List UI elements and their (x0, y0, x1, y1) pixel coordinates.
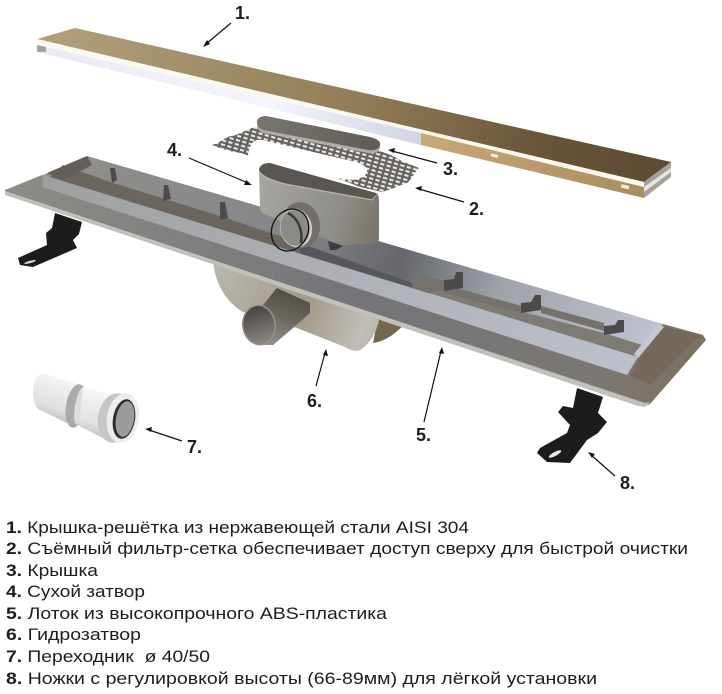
part 7: pipe adapter (33, 374, 143, 446)
long raised ribs (412, 276, 604, 331)
part 2: mesh filter (212, 127, 419, 192)
legend line 4: 4. Сухой затвор (6, 582, 145, 601)
arrow 3 (388, 148, 437, 163)
legend line 2: 2. Съёмный фильтр-сетка обеспечивает доступ сверху для быстрой очистки (6, 539, 688, 558)
arrow 8 (588, 452, 615, 476)
hydro trap body (213, 258, 403, 351)
arrow 1 (203, 23, 231, 47)
tray floor left (47, 165, 300, 262)
black O-ring (265, 203, 315, 257)
legend line 1: 1. Крышка-решётка из нержавеющей стали AISI 304 (6, 518, 469, 537)
callout number 3: 3. (443, 159, 458, 179)
arrow 7 (145, 427, 182, 441)
legend line 8: 8. Ножки с регулировкой высоты (66-89мм) для лёгкой установки (6, 669, 597, 688)
legend text block (6, 518, 688, 688)
legend line 6: 6. Гидрозатвор (6, 625, 141, 644)
drain outlet pipe (239, 288, 310, 348)
callout number 6: 6. (307, 391, 322, 411)
cover gold side (421, 133, 644, 198)
right adjustable foot (537, 388, 607, 463)
callout number 7: 7. (187, 437, 202, 457)
callout number 8: 8. (620, 473, 635, 493)
flange lower edge (5, 191, 650, 407)
arrow 6 (316, 349, 328, 386)
arrow 5 (424, 347, 444, 422)
callout number 2: 2. (469, 199, 484, 219)
cover white edge (37, 39, 644, 187)
cover silver side (37, 45, 421, 145)
callout number 4: 4. (167, 140, 182, 160)
callout number 5: 5. (416, 425, 431, 445)
tray floor middle (300, 243, 430, 305)
legend line 3: 3. Крышка (6, 561, 99, 580)
tray floor right (412, 283, 642, 358)
adapter narrow end (33, 374, 80, 423)
tray flange (5, 175, 706, 406)
legend line 7: 7. Переходник ø 40/50 (6, 647, 210, 666)
part 1: stainless cover grate (37, 28, 671, 198)
legend line 5: 5. Лоток из высокопрочного ABS-пластика (6, 604, 388, 623)
callout number 1: 1. (235, 3, 250, 23)
tray: ABS plastic channel (5, 156, 706, 407)
front rim band (42, 175, 638, 375)
adapter mid section (79, 388, 117, 438)
cover end face (644, 162, 671, 198)
side pipe collar (278, 199, 324, 251)
cover top face (37, 28, 671, 182)
interior walls (43, 156, 663, 357)
left adjustable foot (18, 213, 82, 267)
adapter collar (62, 383, 90, 429)
part 4: dry seal module (259, 163, 379, 257)
arrow 4 (189, 158, 252, 185)
cup opening (259, 163, 377, 199)
adapter socket (94, 390, 136, 446)
rib clips (110, 168, 624, 335)
tray right end wall (630, 327, 703, 385)
cover slots (491, 153, 498, 158)
part 3: cover lid (257, 116, 380, 153)
arrow 2 (415, 186, 464, 202)
